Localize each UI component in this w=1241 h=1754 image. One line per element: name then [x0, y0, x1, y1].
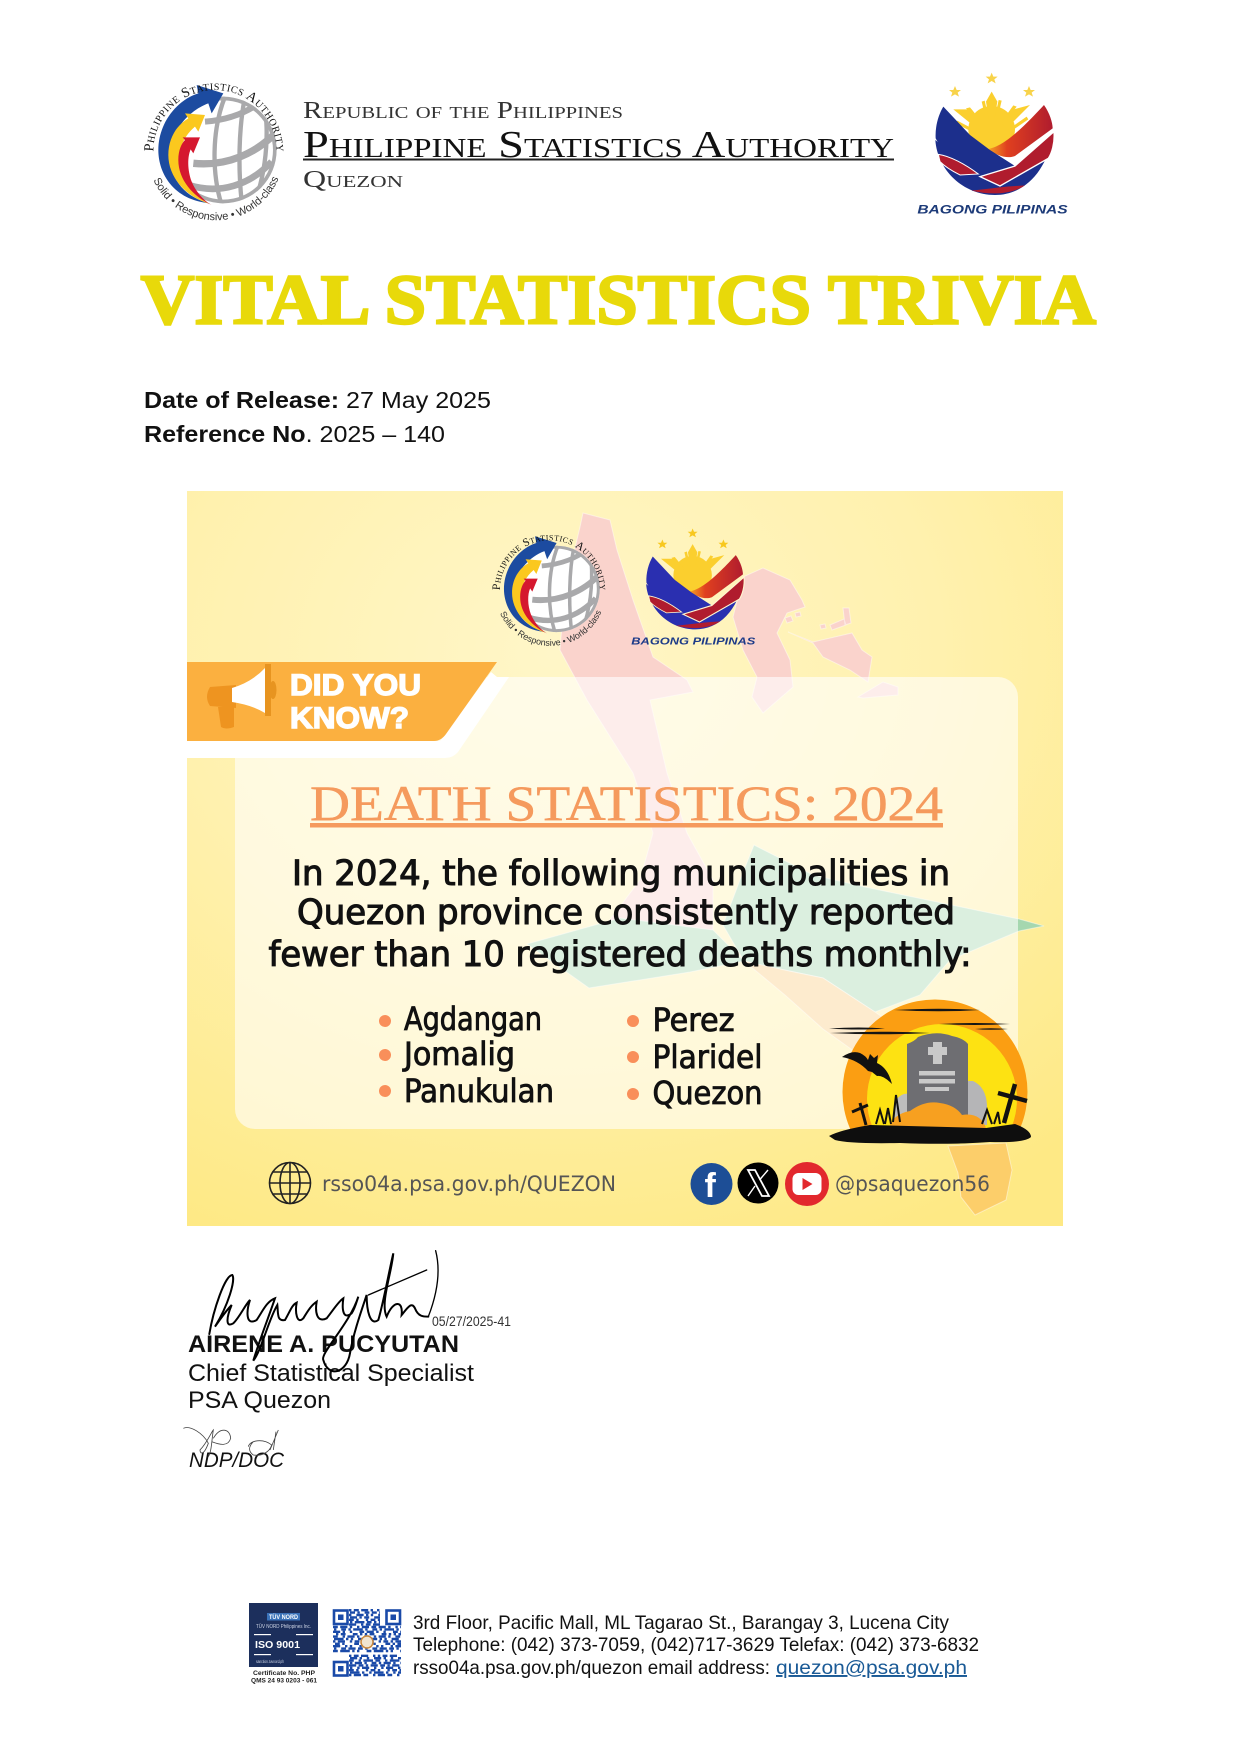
logo: PSA small: Solid • Responsive • World-class — [500, 610, 601, 646]
header: agency name: Quezon — [303, 167, 403, 193]
municipality list: Quezon — [652, 1074, 762, 1112]
logo: Bagong Pilipinas small — [631, 528, 756, 648]
map of Quezon province — [527, 513, 1044, 1215]
logo: PSA small: Philippine Statistics Authority — [492, 535, 606, 590]
logo: Bagong Pilipinas small: BAGONG PILIPINAS — [631, 637, 756, 648]
contact text: rsso04a.psa.gov.ph/quezon email address: — [413, 1657, 770, 1679]
illustration: graveyard — [829, 1000, 1031, 1144]
header: agency name — [303, 98, 894, 193]
signatory: 05/27/2025-41 — [432, 1313, 511, 1329]
footer — [249, 1603, 979, 1684]
website — [270, 1162, 616, 1204]
contact text: quezon@psa.gov.ph — [776, 1657, 967, 1679]
ISO badge: QMS 24 93 0203 - 061 — [251, 1678, 317, 1684]
ISO badge — [249, 1603, 318, 1684]
icon: facebook — [690, 1163, 732, 1205]
contact text: Telephone: (042) 373-7059, (042)717-3629 Telefax: (042) 373-6832 — [413, 1634, 979, 1656]
municipality list: Jomalig — [402, 1035, 515, 1073]
ISO badge: ISO 9001 — [255, 1639, 300, 1651]
translucent content card — [235, 677, 1018, 1129]
logo: Philippine Statistics Authority seal — [144, 83, 284, 220]
ISO badge: TÜV NORD — [269, 1614, 299, 1621]
logo: Bagong Pilipinas — [917, 73, 1068, 216]
signatory: Chief Statistical Specialist — [188, 1360, 474, 1387]
logo: PSA small — [492, 535, 606, 646]
logo: Philippine Statistics Authority seal: Philippine Statistics Authority — [144, 83, 284, 152]
icon: youtube — [785, 1162, 829, 1206]
panel background — [187, 491, 1063, 1226]
icon: globe — [270, 1162, 310, 1204]
municipality list: Perez — [652, 1001, 734, 1039]
header: agency name: Philippine Statistics Authority — [303, 124, 894, 166]
icon: X — [738, 1162, 778, 1204]
did you know banner: DID YOU — [290, 669, 421, 702]
QR code — [333, 1610, 401, 1676]
contact text — [413, 1612, 979, 1679]
intro text: Quezon province consistently reported — [297, 893, 955, 933]
icon: bat — [842, 1052, 892, 1084]
logo: Philippine Statistics Authority seal: Solid • Responsive • World-class — [154, 176, 278, 220]
signatory: PSA Quezon — [188, 1387, 331, 1414]
icon: megaphone — [207, 664, 276, 728]
intro text: fewer than 10 registered deaths monthly: — [268, 935, 972, 975]
municipality list: Agdangan — [404, 1000, 542, 1038]
did you know banner: KNOW? — [290, 702, 409, 735]
municipality list — [379, 1000, 762, 1112]
header: agency name: Republic of the Philippines — [303, 98, 623, 124]
social icons — [690, 1162, 990, 1206]
contact text: 3rd Floor, Pacific Mall, ML Tagarao St., Barangay 3, Lucena City — [413, 1612, 949, 1634]
did you know banner — [187, 662, 509, 758]
release details: Reference No . 2025 – 140 — [144, 421, 445, 447]
signatory — [183, 1251, 511, 1472]
signature — [209, 1251, 438, 1371]
ISO badge: sanction.tuvnord.ph — [256, 1659, 284, 1664]
logo: Bagong Pilipinas: BAGONG PILIPINAS — [917, 202, 1068, 216]
signatory: NDP/DOC — [189, 1448, 284, 1472]
panel: infographic — [187, 491, 1063, 1226]
intro text: In 2024, the following municipalities in — [292, 854, 950, 894]
municipality list: Plaridel — [652, 1038, 762, 1076]
initials — [183, 1428, 278, 1457]
release details — [144, 387, 491, 447]
icon: crosses — [852, 1103, 868, 1125]
municipality list: Panukulan — [404, 1072, 554, 1110]
icon: facebook: f — [704, 1167, 716, 1205]
signatory: AIRENE A. PUCYUTAN — [188, 1331, 459, 1358]
heading: death statistics: DEATH STATISTICS: 2024 — [310, 775, 943, 831]
website: rsso04a.psa.gov.ph/QUEZON — [322, 1172, 616, 1196]
cloud streaks — [829, 1009, 1010, 1034]
ISO badge: TÜV NORD Philippines Inc. — [256, 1623, 311, 1630]
release details: Date of Release: 27 May 2025 — [144, 387, 491, 413]
intro text — [268, 854, 972, 975]
ISO badge: Certificate No. PHP — [253, 1670, 316, 1677]
social icons: @psaquezon56 — [835, 1172, 990, 1196]
